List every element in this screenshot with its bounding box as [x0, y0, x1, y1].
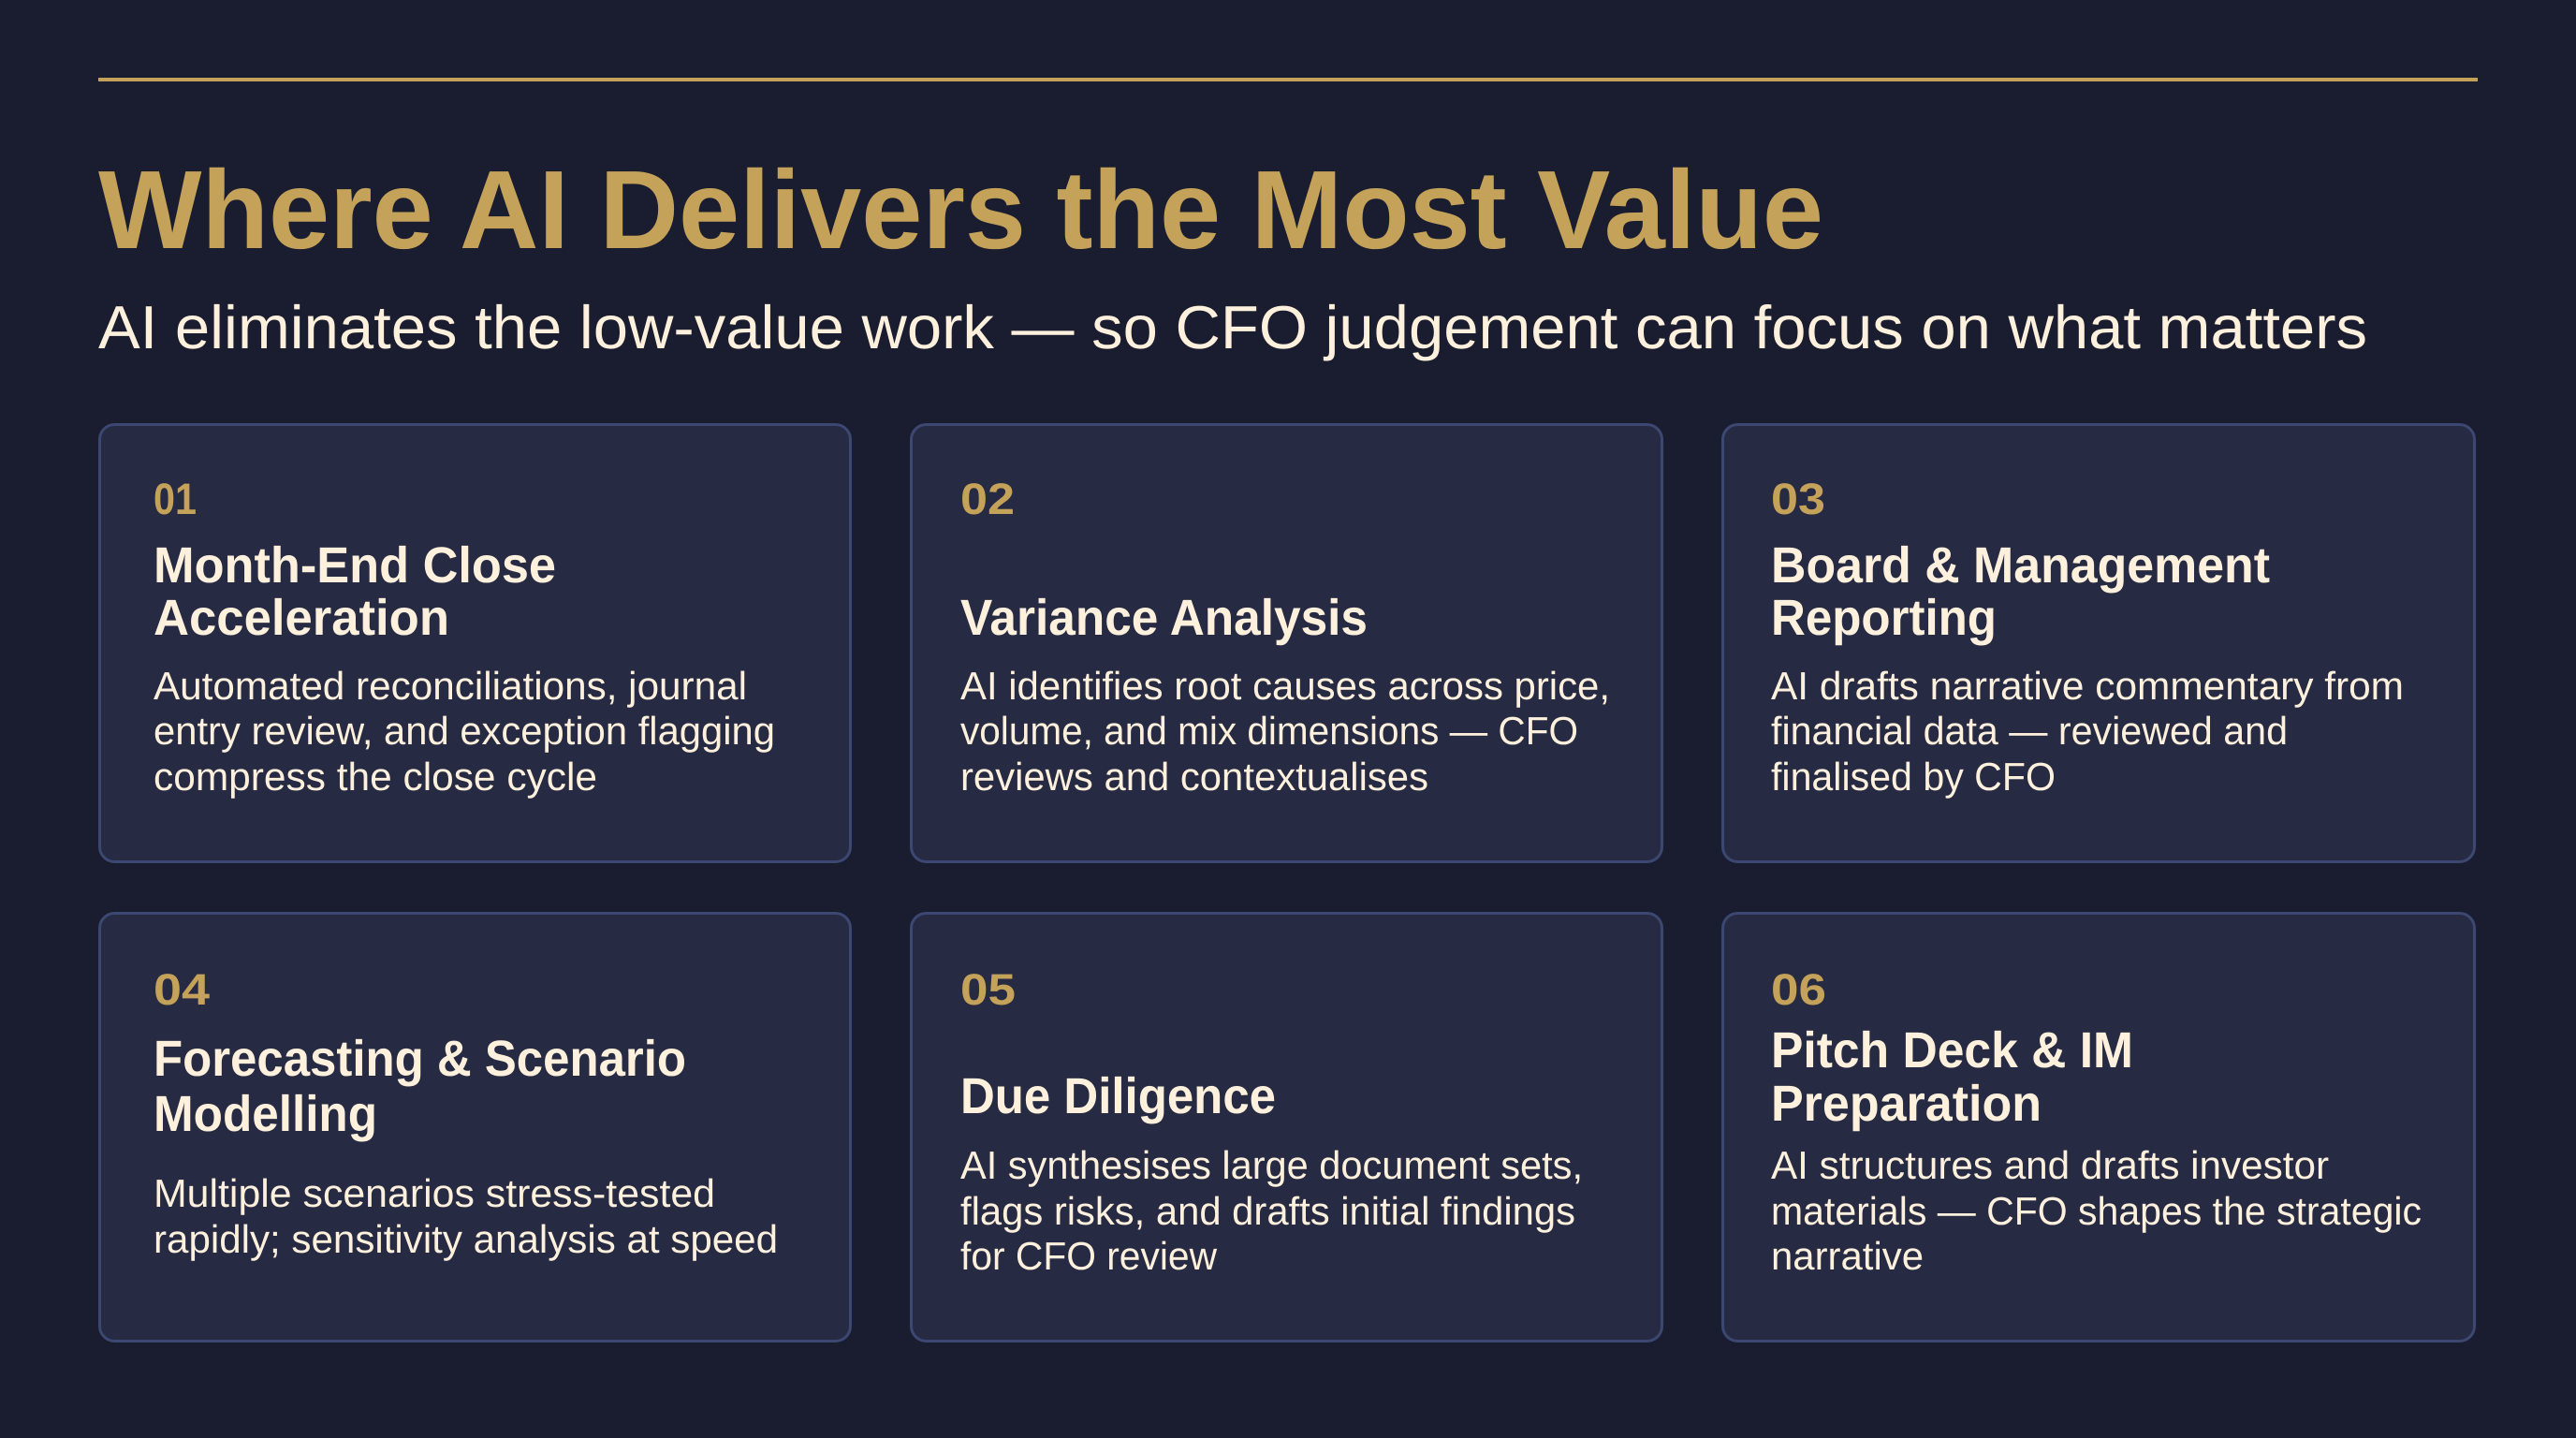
- panel: card 03 board and management reporting: [1722, 425, 2475, 861]
- card body 01: Automated reconciliations, journal: [154, 664, 747, 708]
- card heading 02: Variance Analysis: [960, 590, 1368, 646]
- subtitle: AI eliminates the low-value work — so CFO judgement can focus on what matters: [98, 293, 2367, 361]
- card heading 04: Forecasting & Scenario: [154, 1031, 686, 1087]
- card body 02: volume, and mix dimensions — CFO: [960, 709, 1578, 753]
- card number 06: 06: [1771, 964, 1826, 1014]
- card body 01: entry review, and exception flagging: [154, 709, 775, 753]
- card body 02: [960, 664, 1610, 799]
- panel: card 06 pitch deck and IM preparation: [1722, 914, 2475, 1341]
- card body 02: reviews and contextualises: [960, 755, 1428, 799]
- card body 06: materials — CFO shapes the strategic: [1771, 1189, 2422, 1233]
- card body 04: [154, 1171, 778, 1261]
- card heading 03: Board & Management: [1771, 537, 2270, 594]
- card body 01: compress the close cycle: [154, 755, 597, 799]
- panel: card 02 variance analysis: [912, 425, 1662, 861]
- card body 04: Multiple scenarios stress-tested: [154, 1171, 715, 1215]
- card number 03: 03: [1771, 474, 1825, 523]
- panel: card 05 due diligence: [912, 914, 1662, 1341]
- card number 01: 01: [154, 474, 197, 523]
- card heading 04: [154, 1031, 686, 1142]
- card body 04: rapidly; sensitivity analysis at speed: [154, 1217, 778, 1261]
- card heading 01: Month-End Close: [154, 537, 556, 594]
- title: Where AI Delivers the Most Value: [98, 148, 1823, 272]
- panel: card 01 month-end close: [99, 425, 850, 861]
- card heading 04: Modelling: [154, 1086, 377, 1142]
- card heading 05: Due Diligence: [960, 1068, 1276, 1124]
- card heading 06: Preparation: [1771, 1076, 2042, 1132]
- panel: card 04 forecasting and scenario modelling: [99, 914, 850, 1341]
- card number 04: 04: [154, 964, 210, 1014]
- card number 02: 02: [960, 474, 1015, 523]
- card body 06: [1771, 1143, 2422, 1278]
- card body 03: finalised by CFO: [1771, 755, 2056, 799]
- card heading 01: [154, 537, 556, 646]
- card number 05: 05: [960, 964, 1016, 1014]
- card body 03: [1771, 664, 2404, 799]
- card body 02: AI identifies root causes across price,: [960, 664, 1610, 708]
- card body 03: financial data — reviewed and: [1771, 709, 2288, 753]
- card body 06: narrative: [1771, 1234, 1924, 1278]
- card body 05: flags risks, and drafts initial findings: [960, 1189, 1575, 1233]
- card heading 03: Reporting: [1771, 590, 1997, 646]
- card heading 03: [1771, 537, 2270, 646]
- card body 05: AI synthesises large document sets,: [960, 1143, 1583, 1187]
- card body 06: AI structures and drafts investor: [1771, 1143, 2329, 1187]
- card body 01: [154, 664, 775, 799]
- card body 05: [960, 1143, 1583, 1278]
- card body 05: for CFO review: [960, 1234, 1218, 1278]
- card heading 01: Acceleration: [154, 590, 449, 646]
- card body 03: AI drafts narrative commentary from: [1771, 664, 2404, 708]
- card heading 06: [1771, 1022, 2133, 1132]
- card heading 06: Pitch Deck & IM: [1771, 1022, 2133, 1078]
